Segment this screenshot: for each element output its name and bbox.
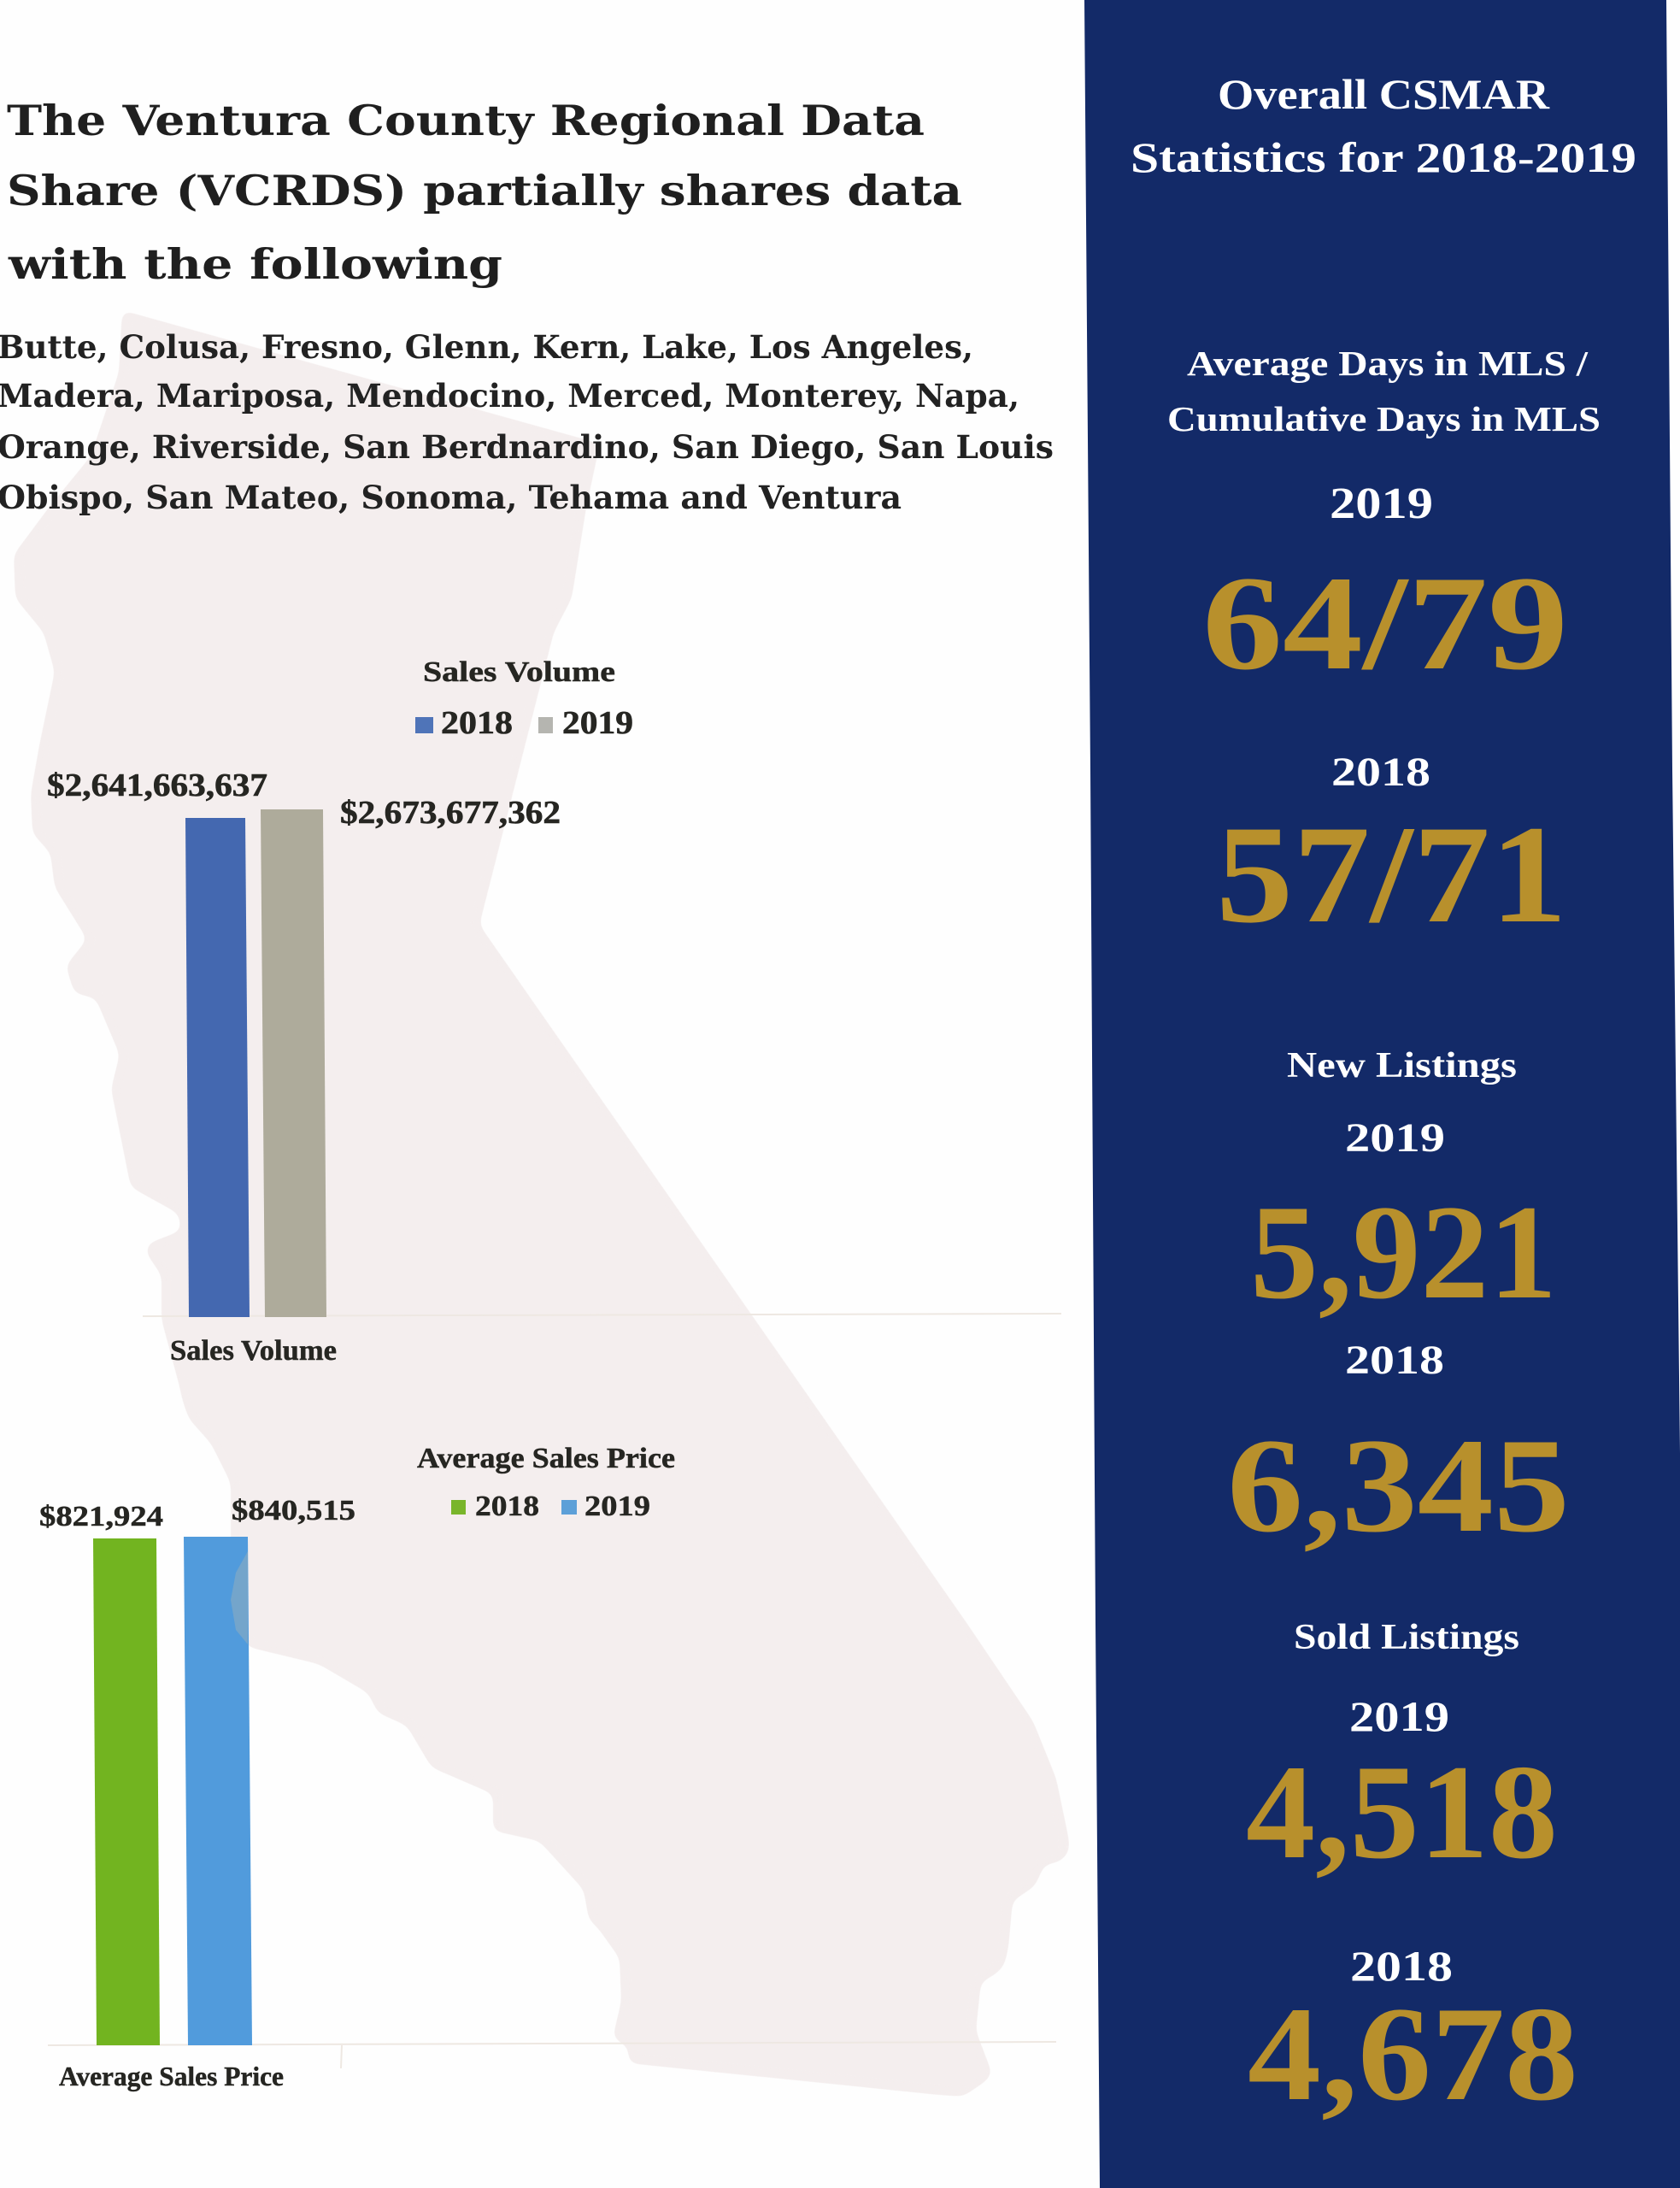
title: with the following [8,239,502,289]
section: sold listings [1246,1618,1578,2129]
title [7,96,962,289]
panel heading [1131,70,1636,181]
panel: CSMAR statistics [1084,0,1680,2188]
section: average days in MLS [1167,344,1601,952]
panel background [1084,0,1680,2188]
year 2019: 2019 [1330,479,1433,528]
panel heading: Overall CSMAR [1218,70,1550,118]
year 2018: 2018 [1331,750,1430,795]
county list: Madera, Mariposa, Mendocino, Merced, Monterey, Napa, [0,377,1019,415]
bar: 2018 [93,1538,160,2045]
legend: 2018 [441,705,513,741]
value 4,678: 4,678 [1248,1979,1578,2129]
bar: 2019 [184,1537,252,2045]
value 6,345: 6,345 [1227,1411,1570,1561]
county list [0,328,1054,516]
county list: Orange, Riverside, San Berdnardino, San Diego, San Louis [0,428,1054,466]
bar chart: average sales price [39,1443,1056,2091]
section heading: Sold Listings [1294,1618,1519,1657]
value label 2018: $2,641,663,637 [47,768,267,803]
legend: 2019 [562,705,633,741]
axis line [143,1314,1061,1316]
value label 2019: $2,673,677,362 [340,795,561,831]
map overlap on bar [231,1551,248,1644]
value label 2018: $821,924 [39,1501,163,1532]
value label 2019: $840,515 [232,1495,355,1526]
section heading: New Listings [1287,1046,1517,1085]
title: Share (VCRDS) partially shares data [7,166,962,215]
legend [451,1491,650,1522]
legend: 2019 [584,1491,650,1522]
section: new listings [1227,1046,1570,1561]
California map silhouette [14,310,1069,2097]
chart title: Average Sales Price [417,1443,675,1474]
chart title: Sales Volume [423,656,615,688]
value 57/71: 57/71 [1216,797,1567,952]
bar: 2018 [185,818,250,1317]
axis line [48,2042,1056,2068]
bar chart: sales volume [47,656,1061,1367]
year 2019: 2019 [1345,1115,1445,1161]
section heading: Cumulative Days in MLS [1167,399,1601,438]
county list: Butte, Colusa, Fresno, Glenn, Kern, Lake, Los Angeles, [0,328,973,366]
legend [415,705,633,741]
value 5,921: 5,921 [1250,1178,1557,1327]
section heading: Average Days in MLS / [1187,344,1589,383]
axis label: Average Sales Price [59,2061,284,2091]
legend: 2018 [475,1491,539,1522]
bar: 2019 [261,809,326,1317]
title: The Ventura County Regional Data [7,96,925,145]
year 2018: 2018 [1350,1942,1453,1990]
axis label: Sales Volume [170,1335,337,1367]
county list: Obispo, San Mateo, Sonoma, Tehama and Ventura [0,479,902,516]
panel heading: Statistics for 2018-2019 [1131,133,1636,181]
section heading [1167,344,1601,438]
year 2019: 2019 [1349,1692,1449,1740]
value 64/79: 64/79 [1202,549,1568,698]
year 2018: 2018 [1345,1338,1444,1383]
value 4,518: 4,518 [1246,1738,1558,1887]
